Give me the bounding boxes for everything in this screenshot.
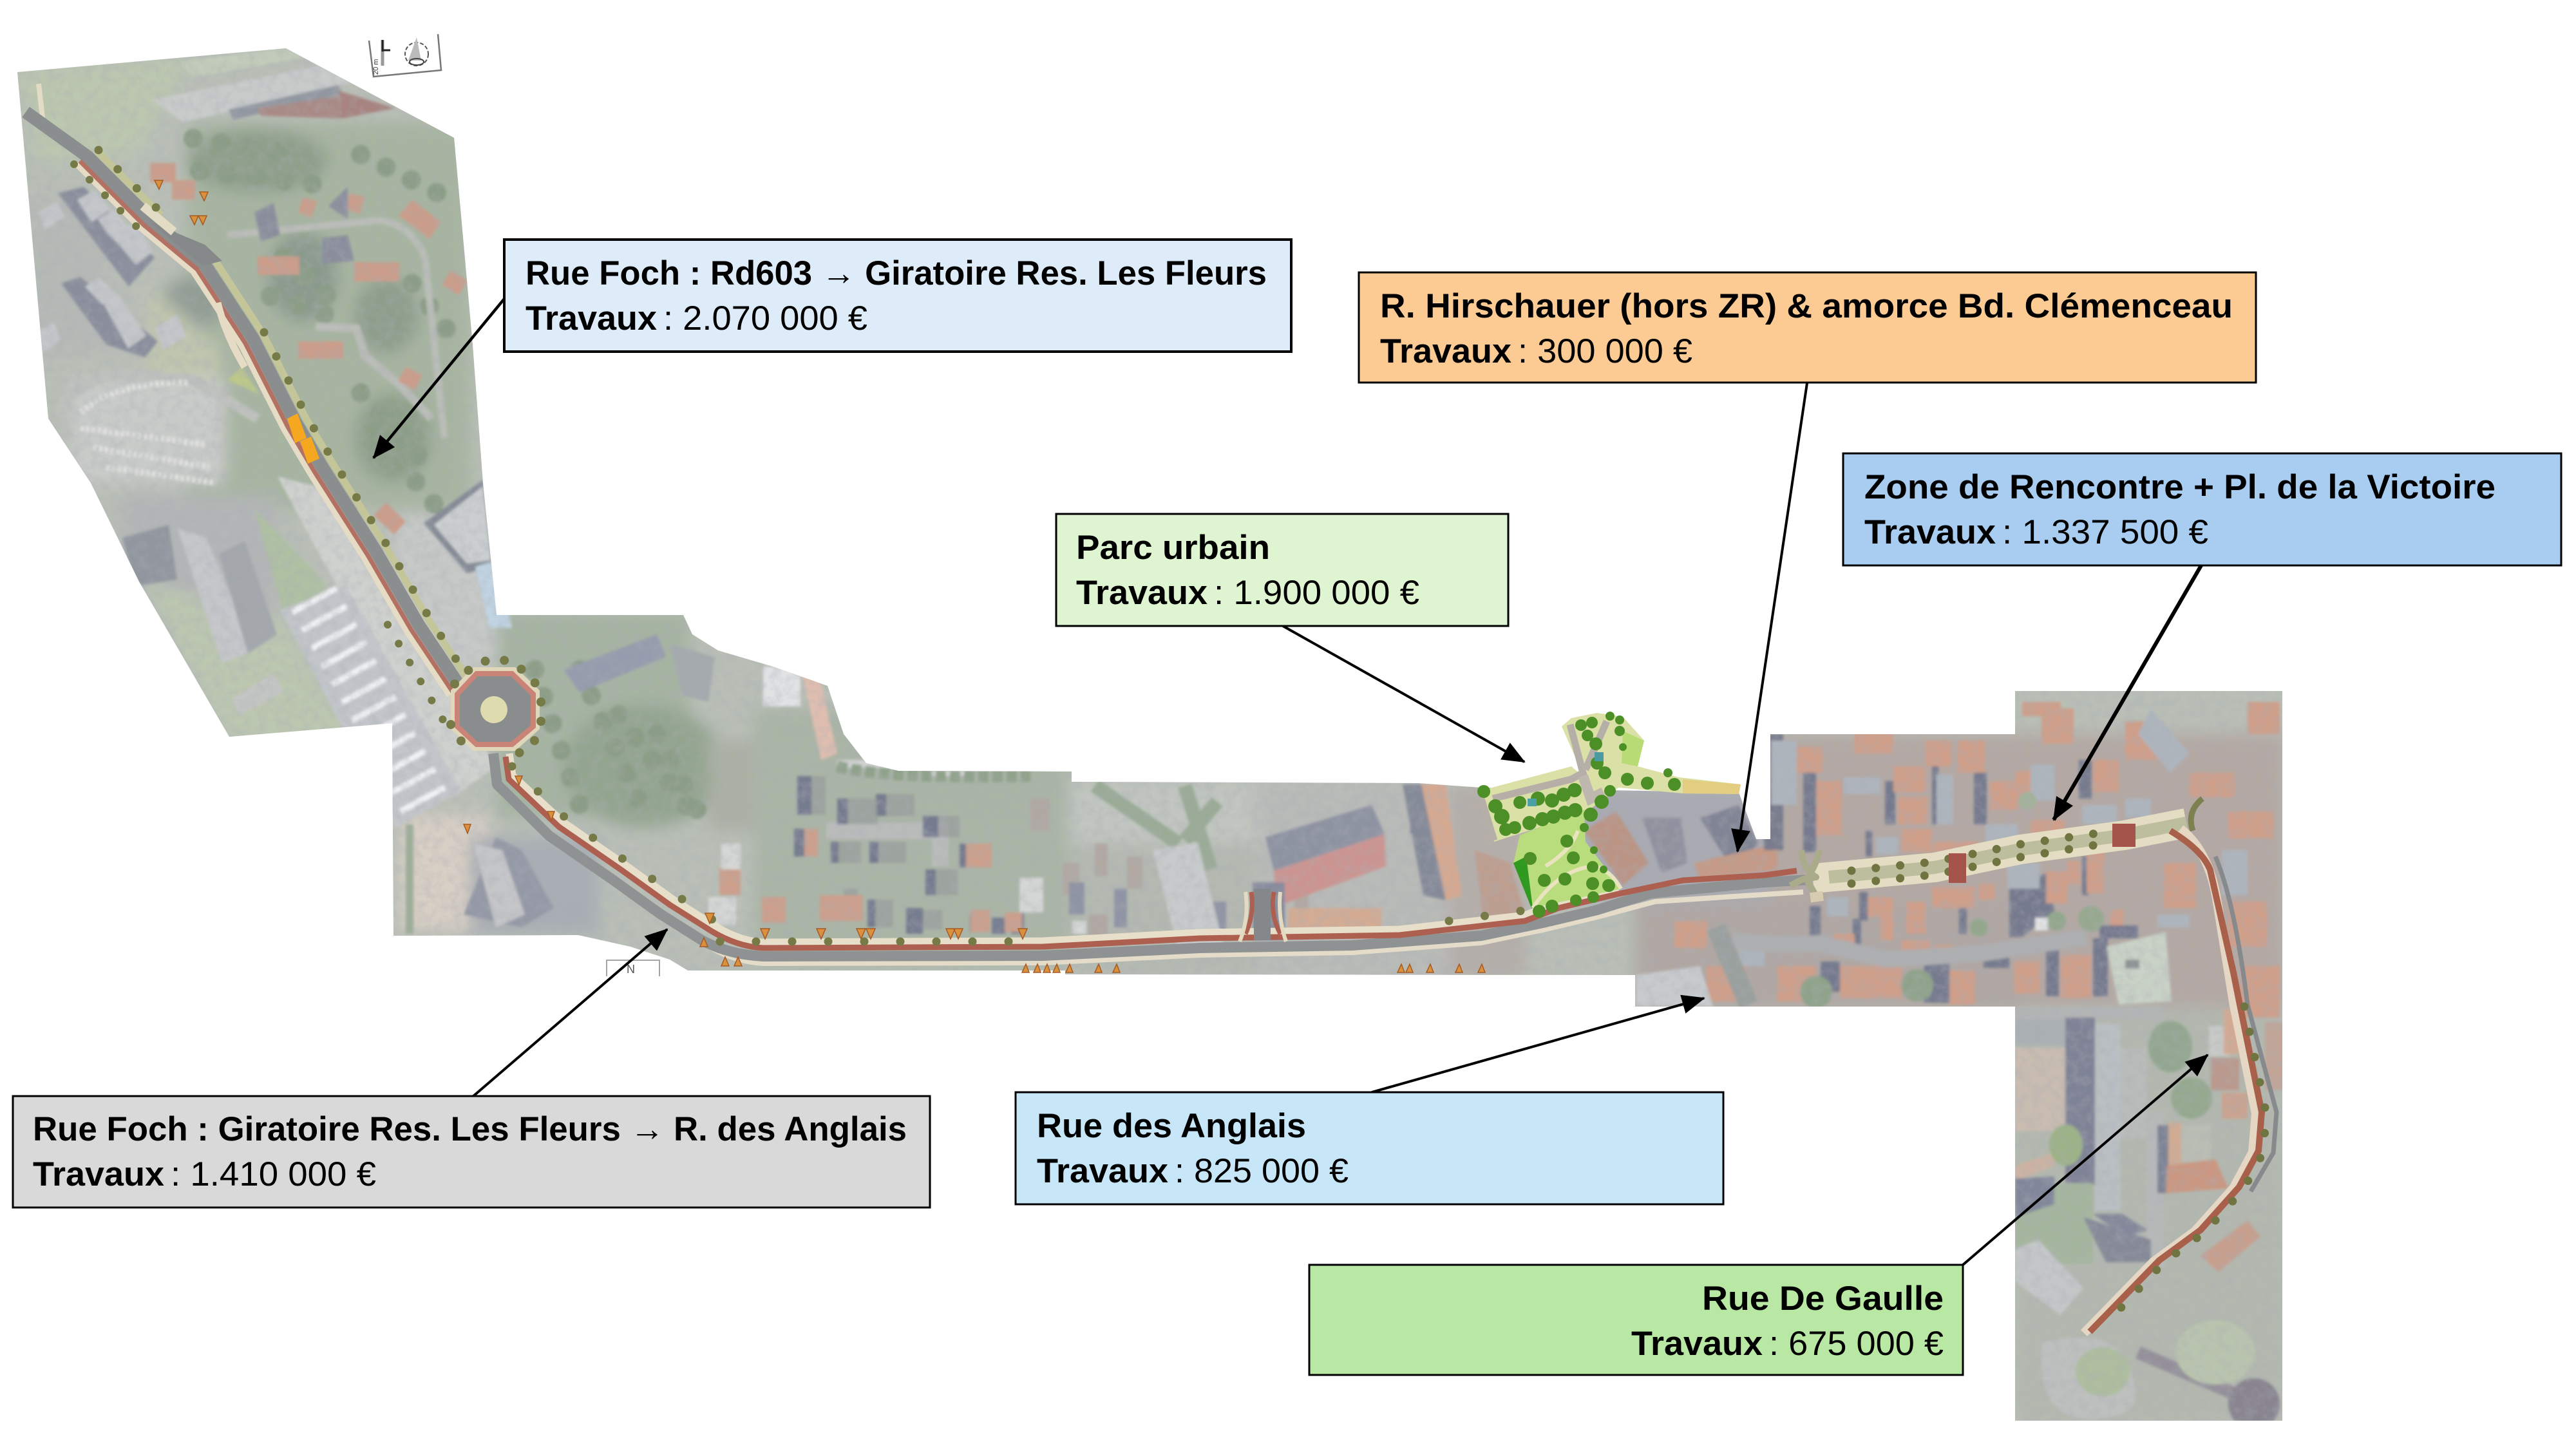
houses towards the long block: [1030, 799, 1309, 938]
left apartment blocks: [32, 190, 186, 355]
callout: R. Hirschauer: [1359, 272, 2256, 383]
middle section roads and lawn: [826, 831, 940, 866]
callout: R. Hirschauer: : 300 000 €: [1518, 332, 1692, 370]
callout: Rue Foch Rd603: Rue Foch : Rd603 → Giratoire Res. Les Fleurs: [526, 254, 1267, 292]
callout: Zone de Rencontre: Zone de Rencontre + Pl. de la Victoire: [1864, 468, 2496, 506]
callout: Rue des Anglais: [1016, 1092, 1723, 1204]
parc urbain plan: [1477, 712, 1741, 918]
under park buildings: [1584, 811, 1649, 886]
callout: Zone de Rencontre: Travaux: [1864, 513, 1996, 551]
soft land-use patches: [27, 58, 2282, 1016]
tree clumps: [193, 138, 708, 831]
callout: Parc urbain: Travaux: [1076, 574, 1208, 612]
middle section pink roofs: [719, 829, 1022, 932]
yield markers along the road: [155, 180, 1485, 972]
top strip and roofs: [153, 66, 350, 122]
arrow: Rue De Gaulle: [1963, 1055, 2208, 1265]
junction near Rue des Anglais: [1240, 889, 1286, 942]
callout: Rue des Anglais: Rue des Anglais: [1037, 1107, 1306, 1145]
callout: Rue Foch giratoire: Travaux: [33, 1155, 165, 1193]
north label box: [607, 960, 659, 979]
roundabout: [451, 659, 541, 756]
callout: Zone de Rencontre: [1843, 453, 2561, 565]
callout: Rue des Anglais: Travaux: [1037, 1152, 1169, 1190]
arrow: Rue Foch Rd603: [374, 299, 504, 458]
arrow: Rue des Anglais: [1372, 998, 1704, 1092]
arrow: R. Hirschauer: [1738, 383, 1807, 851]
callout: Rue Foch giratoire: : 1.410 000 €: [171, 1155, 376, 1193]
south section: [2015, 1007, 2163, 1019]
big buildings: [122, 525, 177, 586]
callout: Parc urbain: [1056, 514, 1508, 626]
town: street: [1732, 937, 2087, 960]
warehouse with skylights: [280, 585, 461, 828]
town: grey roofs: [1739, 708, 2248, 966]
forest hedge lines: [837, 766, 1030, 777]
callout: Parc urbain: : 1.900 000 €: [1214, 574, 1419, 612]
scale bar and north arrow: [369, 34, 441, 77]
road: zone de rencontre: [1790, 799, 2202, 902]
orange crossings: [287, 413, 319, 464]
parking rows in the centre: [1095, 786, 1217, 869]
callout: Rue Foch giratoire: Rue Foch : Giratoire Res. Les Fleurs → R. des Anglais: [33, 1110, 907, 1148]
callout: Rue De Gaulle: Travaux: [1631, 1325, 1763, 1363]
arrow: Parc urbain: [1283, 626, 1524, 762]
callout: Rue Foch Rd603: : 2.070 000 €: [663, 299, 867, 337]
road: Rue Foch north section: [26, 84, 471, 728]
middle section light roofs: [708, 760, 1086, 934]
callout: Rue De Gaulle: : 675 000 €: [1769, 1325, 1944, 1363]
parking rows: [80, 383, 216, 483]
callout: Rue De Gaulle: Rue De Gaulle: [1702, 1280, 1944, 1318]
town: trees: [2047, 911, 2066, 931]
middle section dark roofs: [721, 776, 1417, 934]
callout: R. Hirschauer: R. Hirschauer (hors ZR) & amorce Bd. Clémenceau: [1380, 287, 2233, 325]
middle section grey roofs: [811, 776, 960, 929]
callout: Rue des Anglais: : 825 000 €: [1175, 1152, 1349, 1190]
road: Rue Foch south and east section: [493, 753, 1810, 963]
callout: Zone de Rencontre: : 1.337 500 €: [2002, 513, 2208, 551]
callout: Rue Foch Rd603: [504, 240, 1291, 352]
callout: Rue Foch Rd603: Travaux: [526, 299, 658, 337]
callout: Rue De Gaulle: [1309, 1265, 1963, 1375]
red roof block and long roof: [1274, 834, 1386, 907]
arrow: Rue Foch giratoire: [473, 929, 667, 1096]
road: Rue De Gaulle: [2084, 829, 2277, 1333]
villa roofs: [150, 163, 468, 535]
town: base shadows: [1803, 760, 2138, 1003]
north label box: N: [627, 963, 635, 976]
callout: Rue Foch giratoire: [13, 1096, 930, 1208]
town: salmon roofs: [1674, 702, 2280, 1018]
callout: R. Hirschauer: Travaux: [1380, 332, 1512, 370]
scale bar and north arrow: 20 m: [372, 59, 380, 75]
local roads: [227, 220, 444, 438]
callout: Parc urbain: Parc urbain: [1076, 529, 1270, 567]
arrow: Zone de Rencontre: [2054, 565, 2201, 820]
near the sand lot: [464, 837, 554, 927]
south roundabout: [2041, 1338, 2136, 1419]
apartments east of the roundabout: [564, 634, 666, 692]
shadows of blocks: [58, 187, 354, 357]
big grey building right of road: [424, 480, 493, 573]
square flat roof: [2107, 932, 2172, 1005]
corridor next to warehouse: [278, 477, 496, 799]
lawn triangle: [227, 367, 260, 395]
